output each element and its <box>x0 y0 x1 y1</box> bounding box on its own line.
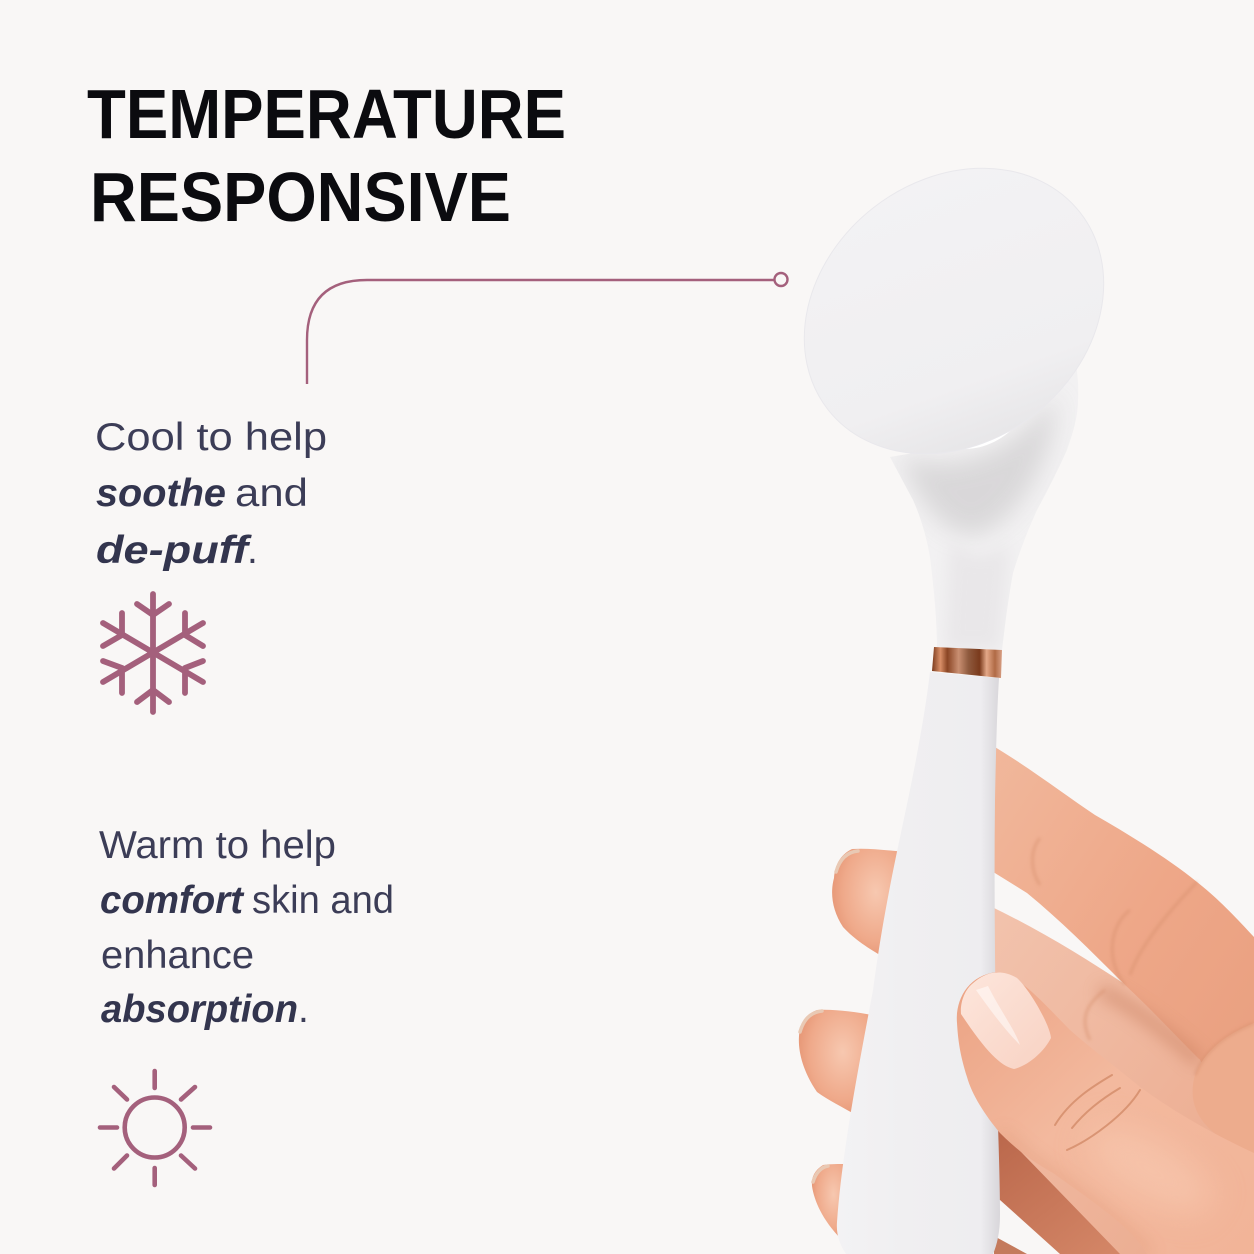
text block: warm: Warm to help <box>99 824 336 867</box>
head <box>747 109 1161 513</box>
rose-gold ring <box>932 647 1002 678</box>
palm lobe <box>1193 1023 1254 1153</box>
text block: warm: absorption <box>101 988 298 1031</box>
title: TEMPERATURE <box>87 75 566 153</box>
index finger <box>990 744 1254 1150</box>
connector line <box>307 273 788 384</box>
text block: warm: comfort <box>100 879 245 922</box>
small dark finger <box>994 1236 1027 1254</box>
text block: warm: enhance <box>101 934 254 977</box>
nail highlight <box>976 986 1020 1045</box>
text block: cool: de-puff <box>96 529 253 572</box>
fingertip: upper <box>832 849 905 958</box>
lower dark finger <box>990 1125 1160 1254</box>
thumbnail <box>961 972 1051 1069</box>
text block: cool: . <box>247 529 258 572</box>
text block: cool: soothe <box>96 472 226 515</box>
text block: warm: skin and <box>252 879 394 922</box>
thumb <box>957 972 1254 1254</box>
neck <box>890 350 1078 650</box>
handle <box>837 672 1000 1254</box>
text block: cool <box>95 416 327 572</box>
nail edges on fingertips <box>800 851 858 1182</box>
title: RESPONSIVE <box>90 158 511 236</box>
middle finger <box>990 906 1254 1254</box>
title <box>87 75 566 236</box>
white sliver <box>962 413 1024 449</box>
text block: warm: . <box>298 988 309 1031</box>
icon: sun <box>100 1071 210 1185</box>
fingertip: lower <box>812 1164 848 1240</box>
shadow between index and middle fingers <box>1100 990 1200 1062</box>
text block: cool: and <box>235 472 308 515</box>
hand <box>799 744 1254 1254</box>
product: wand <box>804 168 1104 1254</box>
text block: warm <box>99 824 394 1031</box>
fingertip: middle <box>799 1010 872 1116</box>
thumb knuckle creases <box>1055 1075 1140 1150</box>
finger creases <box>1032 838 1254 1075</box>
icon: snowflake <box>103 594 203 712</box>
text block: cool: Cool to help <box>95 416 327 459</box>
neck shading <box>900 395 1055 650</box>
